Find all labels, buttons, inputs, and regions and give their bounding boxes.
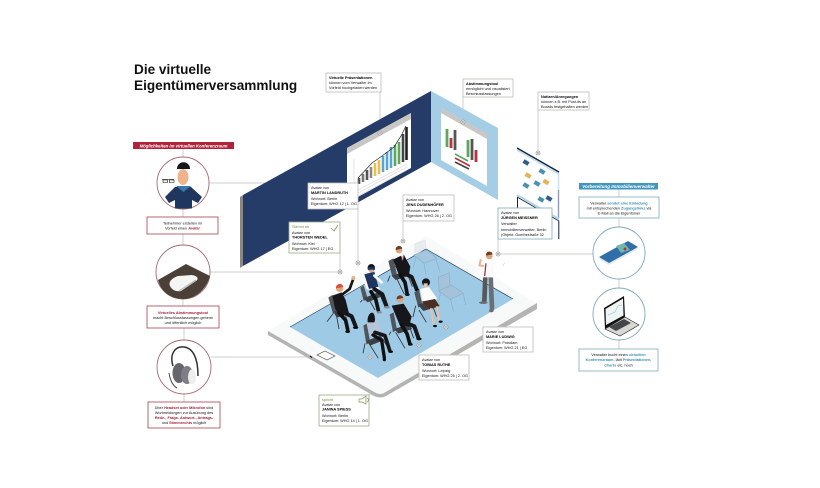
callout: Jens Dudenhöfer bbox=[403, 195, 454, 221]
callout: Jürgen Meissner: Verwalter bbox=[501, 222, 518, 226]
callout: virtual presentations: Vorfeld hochgeladen werden bbox=[329, 86, 377, 90]
callout: notes: Boards festgehalten werden bbox=[541, 105, 588, 109]
icon: laptop in circle bbox=[593, 288, 645, 340]
callout: Marie Ludwig: Wohnort: Potsdam bbox=[486, 341, 517, 345]
callout: Jürgen Meissner: Immobilienverwalter, Berlin bbox=[501, 228, 546, 232]
text: avatar: Vorfeld einen Avatar bbox=[165, 226, 201, 230]
callout: Martin Landruth: MARTIN LANDRUTH bbox=[311, 191, 348, 195]
text: invitation: E-Mail an die Eigentümer bbox=[598, 212, 641, 216]
person: Martin Landruth bbox=[360, 264, 390, 314]
callout: voting tool bbox=[463, 79, 513, 97]
callout: Thorsten Wedel: Eigentum: WHG 17 | EG bbox=[292, 247, 333, 251]
callout: Jens Dudenhöfer: JENS DUDENHÖFER bbox=[406, 202, 444, 207]
text: voting tool: Virtuelles Abstimmungstool bbox=[158, 311, 208, 315]
back wall: navy bbox=[240, 91, 431, 268]
text: headset: Rede-, Frage- Antwort-, Antrags- bbox=[155, 416, 214, 420]
red banner: options: Möglichkeiten im virtuellen Konferenzraum bbox=[140, 143, 228, 148]
callout: Thorsten Wedel: THORSTEN WEDEL bbox=[292, 236, 328, 240]
text: voting tool bbox=[147, 306, 219, 328]
callout: Thorsten Wedel: Avatar von bbox=[292, 231, 310, 235]
person: Janina Spieß bbox=[363, 313, 393, 361]
callout: Jens Dudenhöfer: Wohnort: Hannover bbox=[406, 209, 440, 213]
text: avatar: Teilnehmer erstellen im bbox=[163, 222, 202, 226]
text: invitation bbox=[579, 197, 659, 218]
callout: Jürgen Meissner: JÜRGEN MEISSNER bbox=[501, 215, 538, 220]
callout: Marie Ludwig: Avatar von bbox=[486, 330, 504, 334]
callout: Marie Ludwig: Eigentum: WHG 21 | EG bbox=[486, 346, 527, 350]
icon: smartphone with email in circle bbox=[593, 227, 645, 279]
text: headset bbox=[148, 402, 220, 428]
callout: Janina Spieß: Eigentum: WHG 14 | 1. OG bbox=[322, 419, 368, 423]
icon: check mark bbox=[331, 225, 338, 231]
text: voting tool: und öffentlich möglich bbox=[165, 321, 201, 325]
callout: Thorsten Wedel: Stimmt ab bbox=[292, 225, 309, 229]
text: conference booking bbox=[579, 349, 658, 371]
callout: voting tool: ermöglicht und visualisiert bbox=[466, 87, 511, 91]
callout: Thorsten Wedel bbox=[289, 222, 340, 253]
callout: Janina Spieß: JANINA SPIESS bbox=[322, 408, 351, 412]
person: Jürgen Meissner (standing) bbox=[479, 252, 505, 312]
callout: Jürgen Meissner bbox=[498, 208, 552, 239]
bar chart bbox=[359, 127, 406, 184]
callout: voting tool: Abstimmungstool bbox=[466, 82, 498, 86]
empty chairs bbox=[413, 240, 466, 312]
text: invitation: Verwalter sendet eine Einladung bbox=[590, 202, 648, 206]
person: Marie Ludwig bbox=[413, 278, 443, 327]
voting screen with bars bbox=[441, 108, 487, 186]
callout: notes bbox=[538, 92, 589, 110]
text: voting tool: macht Beschlussfassungen geheim bbox=[153, 316, 213, 320]
text: conference booking: Konferenzraum, lädt Präsentationen, bbox=[586, 358, 651, 362]
side wall: light blue bbox=[431, 91, 498, 200]
callout: virtual presentations: können vom Verwalter im bbox=[329, 81, 372, 85]
person: Thorsten Wedel bbox=[327, 276, 358, 333]
text: conference booking: Verwalter bucht einen virtuellen bbox=[591, 353, 646, 357]
callout: notes: können z.B. mit Post-its an bbox=[541, 100, 586, 104]
callout: notes: Notizen/Anregungen bbox=[541, 95, 579, 99]
callout: Janina Spieß bbox=[319, 395, 369, 426]
callout: Marie Ludwig: MARIE LUDWIG bbox=[486, 335, 515, 339]
callout: Martin Landruth: Eigentum: WHG 12 | 1. OG bbox=[311, 202, 357, 206]
sticky notes bbox=[524, 161, 552, 201]
callout: Tobias Ruthe: Eigentum: WHG 25 | 2. OG bbox=[422, 374, 468, 378]
icon: headset in circle bbox=[157, 340, 211, 394]
text: conference booking: Charts etc. hoch bbox=[604, 364, 633, 368]
callout: Marie Ludwig bbox=[483, 327, 533, 352]
callout: Tobias Ruthe: TOBIAS RUTHE bbox=[422, 363, 451, 367]
icon: avatar in circle bbox=[157, 157, 209, 209]
connector lines bbox=[183, 92, 619, 402]
callout: Jürgen Meissner: (Objekt: Goethestraße 32 bbox=[501, 233, 544, 237]
callout: Tobias Ruthe: Avatar von bbox=[422, 358, 440, 362]
callout: Jens Dudenhöfer: Avatar von bbox=[406, 198, 424, 202]
callout: Jürgen Meissner: Avatar von bbox=[501, 211, 519, 215]
text: headset: Über Headset oder Mikrofon sind bbox=[155, 406, 213, 410]
callout: Martin Landruth: Wohnort: Berlin bbox=[311, 197, 337, 201]
callout: Martin Landruth: Avatar von bbox=[311, 186, 329, 190]
red banner: options bbox=[133, 142, 234, 149]
text: headset: und Stimmrechts möglich bbox=[162, 421, 206, 425]
person: Tobias Ruthe bbox=[389, 295, 422, 348]
icon: voting mouse in circle bbox=[156, 245, 210, 299]
callout: Janina Spieß: Wohnort: Berlin bbox=[322, 414, 348, 418]
title: Eigentümerversammlung bbox=[134, 78, 297, 93]
icon: speaker bbox=[359, 396, 368, 404]
tablet with conference floor bbox=[268, 236, 537, 398]
title bbox=[134, 62, 297, 93]
callout: Martin Landruth bbox=[308, 183, 358, 209]
callout: Tobias Ruthe: Wohnort: Leipzig bbox=[422, 369, 450, 373]
person: Jens Dudenhöfer bbox=[388, 246, 419, 296]
callout: virtual presentations: Virtuelle Präsentationen bbox=[329, 76, 373, 80]
callout: Tobias Ruthe bbox=[419, 355, 469, 380]
text: headset: Wortmeldungen zur Ausübung des bbox=[155, 411, 213, 415]
callout: Janina Spieß: Avatar von bbox=[322, 403, 340, 407]
presentation screen with chart bbox=[347, 113, 411, 203]
callout: virtual presentations bbox=[326, 73, 381, 92]
callout: Jens Dudenhöfer: Eigentum: WHG 26 | 2. OG bbox=[406, 214, 452, 218]
callout: voting tool: Beschlussfassungen bbox=[466, 92, 501, 96]
title: Die virtuelle bbox=[134, 62, 212, 77]
whiteboard with notes bbox=[517, 148, 559, 240]
callout: Janina Spieß: spricht bbox=[322, 398, 334, 402]
blue banner: preparation: Vorbereitung Immobilienverwalter bbox=[582, 184, 655, 189]
connector markers bbox=[338, 120, 540, 359]
text: avatar bbox=[147, 217, 218, 234]
callout: Thorsten Wedel: Wohnort: Kiel bbox=[292, 242, 315, 246]
text: invitation: mit entsprechenden Zugangslinks via bbox=[587, 206, 652, 210]
